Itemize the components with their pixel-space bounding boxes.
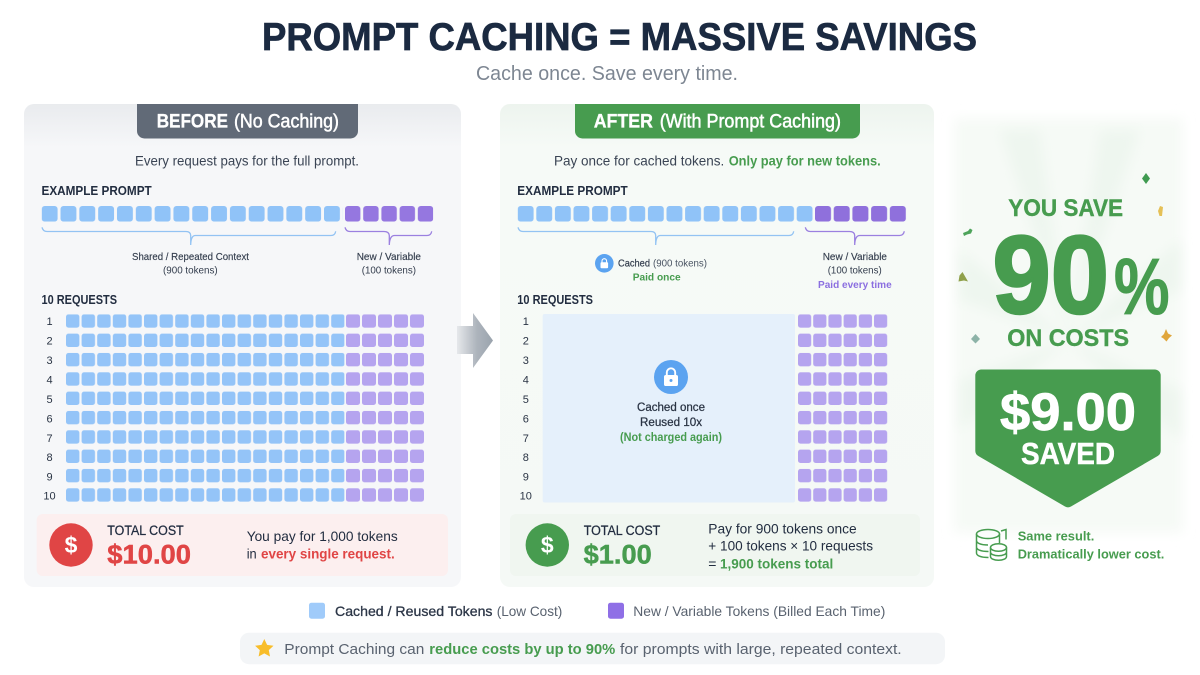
request row numbers: 5 <box>523 394 529 406</box>
request row numbers: 10 <box>43 490 56 502</box>
panel: after (with prompt caching) <box>500 104 934 587</box>
variable token grid <box>798 314 888 502</box>
request row numbers <box>43 316 56 502</box>
brace: new variable <box>805 227 904 245</box>
total cost label: TOTAL COST <box>107 523 184 538</box>
label: shared context: (900 tokens) <box>163 265 218 277</box>
request row numbers: 9 <box>523 472 529 484</box>
request row numbers: 1 <box>46 316 53 328</box>
label: new variable, paid every time <box>818 251 892 291</box>
footer text: for prompts with large, repeated context. <box>620 641 902 658</box>
90 percent figure: % <box>1114 242 1170 331</box>
legend <box>309 603 885 619</box>
arrow: before to after <box>457 313 493 368</box>
after header tab <box>575 104 860 138</box>
label: new variable, paid every time: New / Variable <box>823 251 887 263</box>
total cost value: $1.00 <box>584 539 652 569</box>
decorative burst background <box>954 118 1183 533</box>
legend: variable tokens: New / Variable Tokens (Billed Each Time) <box>633 603 885 619</box>
before header tab: BEFORE <box>157 112 228 133</box>
after description: Only pay for new tokens. <box>729 153 881 169</box>
before header tab <box>137 104 358 138</box>
example prompt token bar <box>42 206 433 222</box>
on costs heading: ON COSTS <box>1007 325 1129 352</box>
after header tab: (With Prompt Caching) <box>660 112 841 133</box>
label: cached, paid once: Cached <box>618 258 650 270</box>
total cost explanation: + 100 tokens × 10 requests <box>708 538 873 554</box>
total cost explanation <box>708 520 873 571</box>
example prompt token bar <box>518 206 907 222</box>
request row numbers: 1 <box>523 316 529 328</box>
total cost explanation: every single request. <box>261 546 395 562</box>
total cost explanation: Pay for 900 tokens once <box>708 520 857 536</box>
after total cost callout <box>510 514 920 576</box>
brace: new variable <box>345 227 432 245</box>
footer text: Prompt Caching can <box>284 641 424 658</box>
title: PROMPT CACHING = MASSIVE SAVINGS <box>262 16 977 59</box>
request row numbers: 5 <box>46 394 53 406</box>
footer callout <box>240 633 945 664</box>
label: new variable: (100 tokens) <box>362 265 416 277</box>
after header tab: AFTER <box>594 112 653 133</box>
request row numbers: 9 <box>46 472 53 484</box>
brace: shared context <box>42 227 336 245</box>
request row numbers: 8 <box>523 452 529 464</box>
icon: dollar green <box>526 523 569 567</box>
request row numbers: 3 <box>523 355 529 367</box>
10 requests heading: 10 REQUESTS <box>517 293 593 307</box>
footer text <box>284 641 902 658</box>
icon: lock large <box>654 360 688 394</box>
request row numbers: 7 <box>523 433 529 445</box>
request row numbers: 7 <box>46 433 53 445</box>
total cost explanation: You pay for 1,000 tokens <box>247 528 398 544</box>
savings note: Same result. <box>1018 529 1094 544</box>
icon: dollar green: $ <box>541 532 554 558</box>
total cost explanation <box>247 528 398 562</box>
panel: before (no caching) <box>24 104 461 587</box>
request row numbers: 8 <box>46 452 53 464</box>
request token grid <box>66 314 424 502</box>
example prompt heading: EXAMPLE PROMPT <box>42 184 152 198</box>
panel: savings <box>954 118 1183 561</box>
request row numbers: 2 <box>523 336 529 348</box>
icon: dollar red <box>49 523 93 567</box>
10 requests heading: 10 REQUESTS <box>42 293 117 307</box>
label: new variable <box>357 251 421 277</box>
label: shared context: Shared / Repeated Context <box>132 251 249 263</box>
total cost value: $10.00 <box>107 539 191 569</box>
request row numbers: 6 <box>46 413 53 425</box>
savings badge <box>975 370 1161 507</box>
label: new variable, paid every time: Paid every time <box>818 279 892 291</box>
legend: cached tokens: (Low Cost) <box>497 603 562 619</box>
total cost explanation: = <box>708 555 716 571</box>
90 percent figure <box>992 214 1170 337</box>
icon: star <box>255 639 273 657</box>
request row numbers: 4 <box>523 374 529 386</box>
request row numbers <box>520 316 532 502</box>
request row numbers: 10 <box>520 490 532 502</box>
you save heading: YOU SAVE <box>1008 195 1123 222</box>
90 percent figure: 90 <box>992 214 1109 337</box>
before description: Every request pays for the full prompt. <box>135 153 359 169</box>
savings badge: SAVED <box>1021 436 1115 471</box>
label: new variable: New / Variable <box>357 251 421 263</box>
icon: coin stacks <box>976 530 1006 560</box>
after description <box>554 153 881 169</box>
savings note: Dramatically lower cost. <box>1018 546 1164 561</box>
brace: cached <box>518 227 794 245</box>
total cost explanation: in <box>247 546 257 562</box>
example prompt heading: EXAMPLE PROMPT <box>517 184 628 198</box>
savings badge: $9.00 <box>1000 383 1136 442</box>
icon: dollar red: $ <box>65 532 78 558</box>
cached block caption: Reused 10x <box>640 417 702 429</box>
cached block spanning all requests <box>543 314 795 502</box>
request row numbers: 6 <box>523 413 529 425</box>
footer text: reduce costs by up to 90% <box>429 641 615 658</box>
label: new variable, paid every time: (100 tokens) <box>828 265 882 277</box>
savings note <box>1018 529 1164 561</box>
after description: Pay once for cached tokens. <box>554 153 724 169</box>
icon: lock small <box>595 254 614 273</box>
label: shared context <box>132 251 249 277</box>
legend: cached tokens: Cached / Reused Tokens <box>335 603 492 619</box>
legend: cached tokens <box>309 603 562 619</box>
request row numbers: 4 <box>46 374 53 386</box>
confetti <box>958 173 1172 344</box>
label: cached, paid once: Paid once <box>633 271 681 283</box>
subtitle: Cache once. Save every time. <box>476 63 738 85</box>
before header tab: (No Caching) <box>234 112 339 133</box>
cached block caption: (Not charged again) <box>620 432 722 444</box>
cached block caption: Cached once <box>637 402 705 414</box>
total cost explanation: 1,900 tokens total <box>720 555 833 571</box>
request row numbers: 3 <box>46 355 53 367</box>
label: cached, paid once <box>595 254 707 283</box>
total cost label: TOTAL COST <box>584 523 660 538</box>
before total cost callout <box>37 514 448 576</box>
label: cached, paid once: (900 tokens) <box>653 258 707 270</box>
cached block caption <box>620 402 722 444</box>
request row numbers: 2 <box>46 336 53 348</box>
